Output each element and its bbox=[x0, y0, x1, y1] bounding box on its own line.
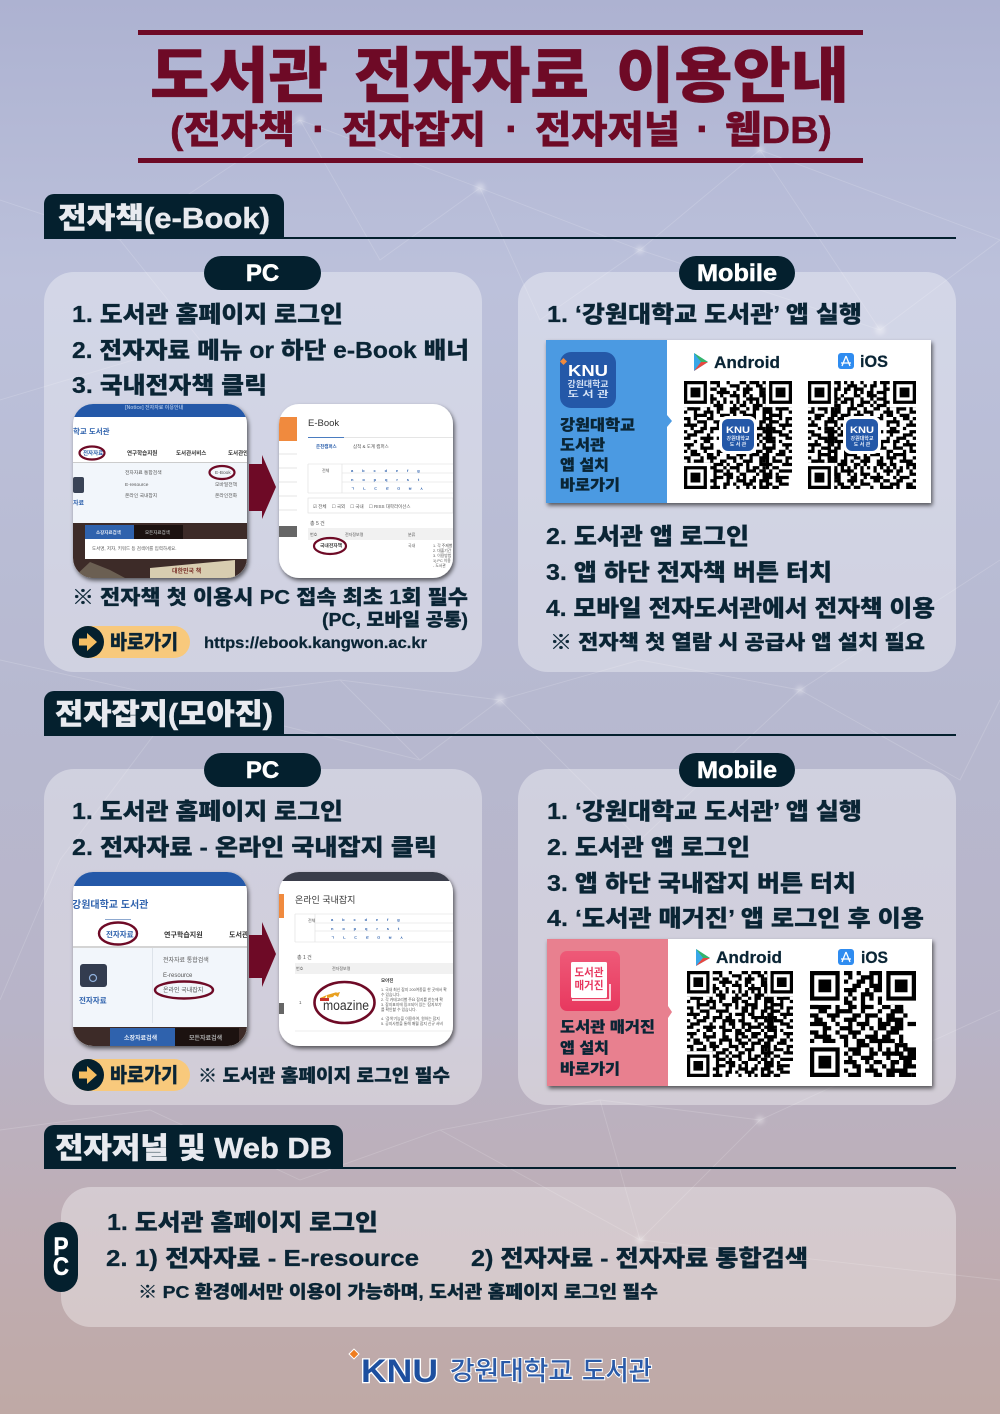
screenshot: moazine: 수 있습니다. bbox=[381, 992, 401, 997]
PC badge: PC bbox=[246, 757, 279, 784]
PC badge: PC bbox=[246, 260, 279, 287]
screenshot: e-book list: 총 5 건 bbox=[310, 520, 325, 527]
app icon: 매거진 bbox=[574, 978, 604, 992]
screenshot: menu: 연구학습지원 bbox=[164, 930, 203, 939]
screenshot: e-book list: 2. 대출기간 bbox=[433, 548, 452, 553]
section heading: e-Book: 전자책(e-Book) bbox=[58, 202, 270, 235]
screenshot: e-book list: - 도서관 bbox=[433, 563, 446, 568]
steps bbox=[547, 798, 924, 931]
label: 도서관 bbox=[560, 437, 605, 454]
screenshot: menu: 전자자료 bbox=[106, 929, 134, 939]
qr android bbox=[684, 381, 792, 489]
label: 바로가기 bbox=[560, 1061, 620, 1078]
ios label bbox=[838, 949, 888, 967]
screenshot: library homepage menu: 온라인 국내잡지 bbox=[125, 492, 157, 499]
button: shortcut: 바로가기 bbox=[110, 1064, 178, 1087]
note: (PC, 모바일 공통) bbox=[322, 610, 468, 630]
Mobile badge bbox=[679, 753, 795, 787]
screenshot: e-book list: E-Book bbox=[308, 418, 339, 429]
section heading: magazine: 전자잡지(모아진) bbox=[55, 698, 273, 731]
qr ios: 강원대학교 bbox=[850, 435, 874, 442]
PC badge: P bbox=[54, 1233, 68, 1261]
steps: ※ PC 환경에서만 이용이 가능하며, 도서관 홈페이지 로그인 필수 bbox=[138, 1282, 658, 1302]
title block: 전자잡지 bbox=[342, 110, 486, 152]
note bbox=[72, 586, 468, 630]
screenshot: moazine: 전자정보명 bbox=[332, 965, 351, 971]
steps: 2. 도서관 앱 로그인 bbox=[546, 523, 749, 549]
screenshot: moazine: 모아진 bbox=[381, 977, 393, 984]
title block: · bbox=[505, 105, 519, 152]
ios label: iOS bbox=[861, 949, 888, 967]
title block: (전자책 bbox=[170, 110, 295, 152]
screenshot: menu: 강원대학교 도서관 bbox=[72, 898, 148, 911]
screenshot: moazine: ㄱ ㄴ ㄷ ㄹ ㅁ ㅂ ㅅ bbox=[331, 935, 404, 940]
screenshot: library homepage menu: [Notice] 전자자료 이용안내 bbox=[125, 404, 184, 411]
screenshot: library homepage menu: 자료 bbox=[73, 499, 85, 507]
qr android: 도 서 관 bbox=[730, 441, 747, 448]
title block: 웹DB) bbox=[725, 110, 832, 152]
screenshot: moazine: 번호 bbox=[296, 965, 304, 971]
Mobile badge: Mobile bbox=[697, 757, 777, 784]
Mobile badge bbox=[679, 256, 795, 290]
screenshot: library homepage menu: 대한민국 책 bbox=[172, 567, 201, 575]
screenshot: e-book list: ㄱ ㄴ ㄷ ㄹ ㅁ ㅂ ㅅ bbox=[351, 486, 424, 491]
label: 도서관 매거진 bbox=[560, 1019, 655, 1036]
screenshot: moazine: moazine bbox=[323, 998, 369, 1013]
screenshot: menu: 도서관 bbox=[229, 930, 249, 939]
screenshot: library homepage menu: 모바일전책 bbox=[215, 481, 237, 488]
qr ios: KNU bbox=[850, 425, 874, 436]
label: 바로가기 bbox=[560, 477, 620, 494]
screenshot: library homepage menu: 도서관안내 bbox=[228, 449, 253, 457]
screenshot: library homepage menu: 연구학습지원 bbox=[127, 449, 157, 457]
steps: 2. 도서관 앱 로그인 bbox=[547, 834, 750, 860]
screenshot: moazine: 3. 잡지표지에 링크되어 있는 '잡지보기' bbox=[381, 1002, 443, 1007]
panel: e-Book Mobile bbox=[518, 256, 956, 672]
app icon: 도서관 bbox=[574, 966, 604, 979]
android label: Android bbox=[714, 353, 780, 372]
panel: journals and web DB bbox=[44, 1187, 956, 1327]
label: 앱 설치 bbox=[560, 457, 609, 474]
ios label bbox=[838, 353, 888, 371]
screenshot: library homepage menu: 모든자료검색 bbox=[145, 529, 170, 536]
app download card bbox=[546, 340, 931, 503]
arrow bbox=[249, 455, 276, 519]
qr ios: 도 서 관 bbox=[854, 441, 871, 448]
button: shortcut bbox=[72, 626, 190, 658]
screenshot: e-book list: 국내전자책 bbox=[320, 542, 342, 549]
screenshot: e-book list: 전체 bbox=[322, 467, 330, 473]
screenshot: menu: 모든자료검색 bbox=[189, 1034, 222, 1042]
screenshot: e-book list: 1) PC 이용 bbox=[433, 558, 451, 563]
screenshot: library homepage menu: 소장자료검색 bbox=[96, 529, 121, 536]
screenshot: menu: 전자자료 bbox=[79, 995, 107, 1005]
app download card bbox=[547, 939, 932, 1086]
screenshot: e-book list: 3. 이용방법 bbox=[433, 553, 452, 558]
Mobile badge: Mobile bbox=[697, 260, 777, 287]
button: shortcut: 바로가기 bbox=[110, 631, 178, 654]
screenshot: library homepage menu: 학교 도서관 bbox=[73, 426, 110, 436]
screenshot: e-book list: 전자정보명 bbox=[345, 531, 364, 537]
screenshot: e-book list: ☑ 전체 ☐ 국외 ☐ 국내 ☐ RISS 대학라이선스 bbox=[313, 503, 411, 510]
qr android: KNU bbox=[726, 425, 750, 436]
panel: magazine Mobile bbox=[518, 753, 956, 1105]
screenshot: moazine: 2. 각 카테고리별 주요 잡지를 한눈에 확 bbox=[381, 997, 443, 1002]
note: ※ 전자책 첫 이용시 PC 접속 최초 1회 필수 bbox=[72, 586, 468, 609]
qr android bbox=[687, 971, 793, 1077]
screenshot: moazine: 총 1 건 bbox=[297, 954, 312, 961]
section heading: e-Book bbox=[44, 194, 956, 239]
screenshot: library homepage menu: E-resource bbox=[125, 482, 149, 488]
section heading: journals and web DB bbox=[44, 1125, 956, 1169]
screenshot: library homepage menu: 온라인전화 bbox=[215, 492, 238, 499]
app icon bbox=[560, 352, 616, 408]
PC badge bbox=[44, 1222, 78, 1292]
screenshot: menu: 소장자료검색 bbox=[124, 1034, 157, 1042]
screenshot: library homepage menu: E-Book bbox=[215, 470, 231, 476]
title block bbox=[138, 30, 863, 163]
steps: 3. 앱 하단 전자책 버튼 터치 bbox=[546, 559, 832, 585]
title block: 전자자료 bbox=[354, 43, 589, 110]
steps: 3. 국내전자책 클릭 bbox=[72, 372, 267, 398]
screenshot: menu: 온라인 국내잡지 bbox=[163, 986, 203, 994]
app icon: 강원대학교 bbox=[568, 379, 609, 389]
screenshot: menu bbox=[72, 872, 249, 1046]
app icon: 도 서 관 bbox=[568, 389, 609, 399]
arrow bbox=[249, 922, 276, 987]
logo: KNU library: KNU bbox=[361, 1353, 438, 1389]
screenshot: moazine: n o p q r s t bbox=[331, 926, 400, 931]
section heading: magazine bbox=[44, 691, 956, 736]
step 1: 1. ‘강원대학교 도서관’ 앱 실행 bbox=[547, 301, 862, 327]
section heading: journals and web DB: 전자저널 및 Web DB bbox=[55, 1132, 332, 1165]
screenshot: e-book list: 삼척 & 도계 캠퍼스 bbox=[353, 443, 389, 450]
steps: 2. 1) 전자자료 - E-resource bbox=[106, 1245, 419, 1271]
steps: ※ 전자책 첫 열람 시 공급사 앱 설치 필요 bbox=[550, 631, 925, 654]
logo: KNU library bbox=[349, 1349, 652, 1389]
title block: 도서관 bbox=[150, 43, 328, 110]
screenshot: library homepage menu: 도서명, 저자, 키워드 등 검색어를 입력하세요. bbox=[92, 545, 177, 552]
screenshot: moazine: 1 bbox=[299, 1000, 302, 1005]
steps: 2. 전자자료 - 온라인 국내잡지 클릭 bbox=[72, 834, 437, 860]
screenshot: moazine: 온라인 국내잡지 bbox=[295, 894, 355, 905]
logo: KNU library: 도서관 bbox=[582, 1356, 652, 1386]
steps: 1. 도서관 홈페이지 로그인 bbox=[72, 301, 343, 327]
steps bbox=[546, 523, 935, 654]
label: 앱 설치 bbox=[560, 1040, 609, 1057]
screenshot: moazine bbox=[279, 872, 453, 1046]
PC badge bbox=[204, 753, 321, 787]
screenshot: e-book list: 번호 bbox=[310, 531, 318, 537]
steps bbox=[106, 1209, 808, 1302]
screenshot: library homepage menu: 도서관서비스 bbox=[176, 449, 206, 457]
app icon: KNU bbox=[568, 363, 608, 380]
screenshot: moazine: 4. '검색'기능을 이용하여, 원하는 잡지 bbox=[381, 1016, 440, 1021]
panel: magazine PC bbox=[44, 753, 482, 1105]
screenshot: moazine: a b c d e f g bbox=[331, 917, 400, 922]
steps: 1. 도서관 홈페이지 로그인 bbox=[107, 1209, 378, 1235]
app icon bbox=[560, 951, 620, 1011]
link: https://ebook.kangwon.ac.kr bbox=[204, 635, 427, 652]
screenshot: e-book list: 춘천캠퍼스 bbox=[316, 443, 337, 450]
logo: KNU library: 강원대학교 bbox=[450, 1356, 573, 1386]
qr ios bbox=[810, 971, 916, 1077]
screenshot: e-book list: 국내 bbox=[408, 542, 416, 548]
label bbox=[560, 1019, 655, 1078]
steps bbox=[72, 301, 469, 398]
screenshot: moazine: 5. 공지사항을 통해 매월 잡지 신규 서비 bbox=[381, 1021, 443, 1026]
label: 강원대학교 bbox=[560, 416, 635, 434]
title block: 이용안내 bbox=[616, 43, 849, 110]
steps: 1. 도서관 홈페이지 로그인 bbox=[72, 798, 343, 824]
steps: 4. 모바일 전자도서관에서 전자책 이용 bbox=[546, 595, 935, 621]
title block: · bbox=[312, 105, 326, 152]
ios label: iOS bbox=[860, 353, 888, 371]
screenshot: e-book list: 1. 각 주제별 bbox=[433, 543, 453, 548]
screenshot: library homepage menu bbox=[73, 404, 253, 578]
qr android: 강원대학교 bbox=[726, 435, 750, 442]
screenshot: moazine: 전체 bbox=[308, 917, 316, 923]
steps: 3. 앱 하단 국내잡지 버튼 터치 bbox=[547, 870, 856, 896]
panel: e-Book PC bbox=[44, 256, 482, 672]
screenshot: moazine: 1. 국내 최신 잡지 200여종을 한 곳에서 확 bbox=[381, 987, 447, 992]
screenshot: menu: 전자자료 통합검색 bbox=[163, 956, 209, 964]
steps bbox=[72, 798, 437, 860]
screenshot: e-book list: a b c d e f g bbox=[351, 468, 420, 473]
steps: 4. ‘도서관 매거진’ 앱 로그인 후 이용 bbox=[547, 905, 924, 931]
steps: 2. 전자자료 메뉴 or 하단 e-Book 배너 bbox=[72, 337, 469, 363]
screenshot: e-book list bbox=[279, 404, 453, 578]
screenshot: e-book list: 분류 bbox=[408, 531, 416, 537]
button: shortcut bbox=[72, 1059, 190, 1091]
qr ios bbox=[808, 381, 916, 489]
PC badge bbox=[204, 256, 321, 290]
title block: 전자저널 bbox=[535, 110, 680, 152]
screenshot: library homepage menu: 전자자료 bbox=[83, 449, 103, 457]
steps: 2) 전자자료 - 전자자료 통합검색 bbox=[471, 1245, 808, 1271]
android label: Android bbox=[716, 948, 782, 967]
label bbox=[560, 416, 635, 494]
PC badge: C bbox=[53, 1253, 69, 1281]
steps: 1. ‘강원대학교 도서관’ 앱 실행 bbox=[547, 798, 862, 824]
screenshot: moazine: 를 확인할 수 있습니다. bbox=[381, 1007, 417, 1012]
screenshot: menu: E-resource bbox=[163, 973, 193, 979]
screenshot: e-book list: n o p q r s t bbox=[351, 477, 420, 482]
title block: · bbox=[696, 105, 710, 152]
note: ※ 도서관 홈페이지 로그인 필수 bbox=[198, 1066, 450, 1086]
screenshot: library homepage menu: 전자자료 통합검색 bbox=[125, 469, 162, 476]
